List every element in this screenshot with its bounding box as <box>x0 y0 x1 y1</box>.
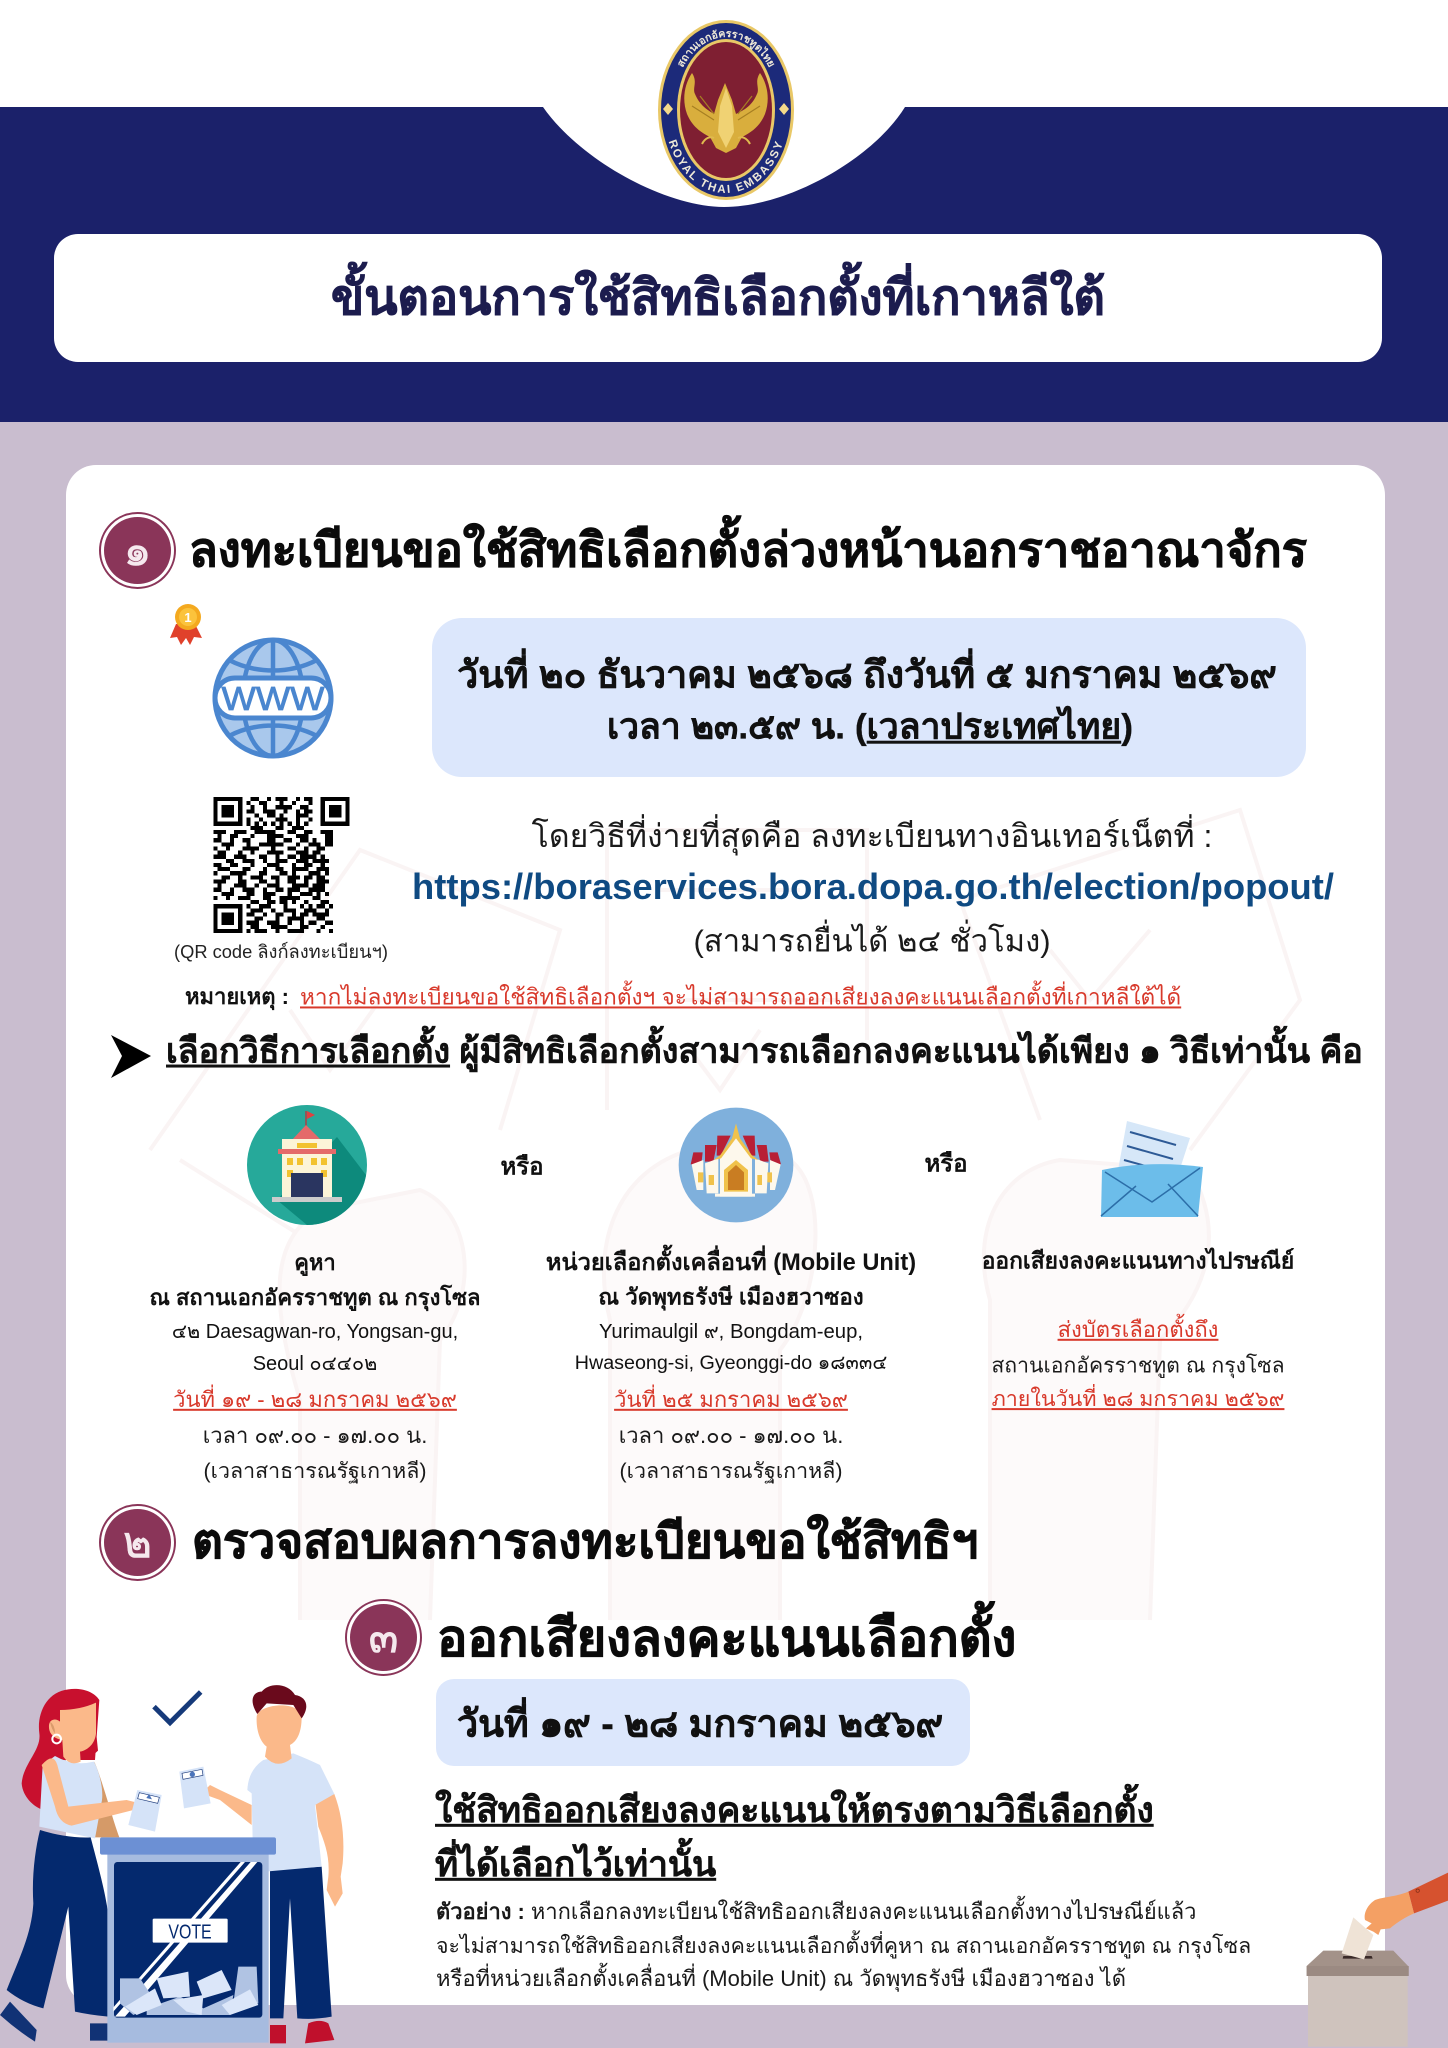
column 2 address line 2: Hwaseong-si, Gyeonggi-do ๑๘๓๓๔ <box>575 1352 887 1374</box>
column 2 place: ณ วัดพุทธรังษี เมืองฮวาซอง <box>598 1285 864 1310</box>
registration intro text: โดยวิธีที่ง่ายที่สุดคือ ลงทะเบียนทางอินเทอร์เน็ตที่ : <box>532 818 1212 854</box>
badge 2: ๒ <box>123 1518 152 1567</box>
header band <box>0 107 1448 422</box>
badge 3: ๓ <box>368 1613 399 1662</box>
example line 1: ตัวอย่าง : หากเลือกลงทะเบียนใช้สิทธิออกเสียงลงคะแนนเลือกตั้งทางไปรษณีย์แล้ว <box>436 1899 1196 1924</box>
remark label: หมายเหตุ : <box>185 984 289 1009</box>
QR caption: (QR code ลิงก์ลงทะเบียนฯ) <box>174 941 388 962</box>
date pill 1 <box>432 618 1306 777</box>
example line 3: หรือที่หน่วยเลือกตั้งเคลื่อนที่ (Mobile Unit) ณ วัดพุทธรังษี เมืองฮวาซอง ได้ <box>436 1966 1126 1991</box>
column 1 time: เวลา ๐๙.๐๐ - ๑๗.๐๐ น. <box>203 1423 427 1448</box>
date text line 2: เวลา ๒๓.๕๙ น. (เวลาประเทศไทย) <box>607 707 1133 747</box>
registration URL: https://boraservices.bora.dopa.go.th/election/popout/ <box>412 866 1334 907</box>
woman <box>0 1689 149 2042</box>
example line 2: จะไม่สามารถใช้สิทธิออกเสียงลงคะแนนเลือกตั้งที่คูหา ณ สถานเอกอัครราชทูต ณ กรุงโซล <box>436 1934 1251 1958</box>
ballot box: VOTE <box>168 1921 212 1944</box>
column 1 timezone: (เวลาสาธารณรัฐเกาหลี) <box>204 1459 426 1483</box>
check mark <box>154 1692 201 1723</box>
arrow <box>111 1035 151 1078</box>
instruction line 2: ที่ได้เลือกไว้เท่านั้น <box>435 1845 716 1884</box>
badge 1: ๑ <box>124 526 151 575</box>
title: ขั้นตอนการใช้สิทธิเลือกตั้งที่เกาหลีใต้ <box>331 271 1105 325</box>
column 2 time: เวลา ๐๙.๐๐ - ๑๗.๐๐ น. <box>619 1423 843 1448</box>
date text line 1: วันที่ ๒๐ ธันวาคม ๒๕๖๘ ถึงวันที่ ๕ มกราคม ๒๕๖๙ <box>457 654 1277 696</box>
content card <box>66 465 1385 2005</box>
man <box>202 1685 343 2043</box>
title pill <box>54 234 1382 362</box>
illustration: hand dropping ballot into box <box>1306 1872 1448 2046</box>
column 3 title: ออกเสียงลงคะแนนทางไปรษณีย์ <box>982 1247 1294 1273</box>
date text 3: วันที่ ๑๙ - ๒๘ มกราคม ๒๕๖๙ <box>457 1702 943 1744</box>
column 2 timezone: (เวลาสาธารณรัฐเกาหลี) <box>620 1459 842 1483</box>
icon: www globe: WWW <box>222 680 325 717</box>
watermark: raised hands with ballots <box>148 808 1302 1620</box>
ballots in hands <box>128 1767 211 1832</box>
column 3 destination: สถานเอกอัครราชทูต ณ กรุงโซล <box>991 1354 1285 1377</box>
instruction line 1: ใช้สิทธิออกเสียงลงคะแนนให้ตรงตามวิธีเลือกตั้ง <box>435 1791 1154 1830</box>
column 2 title: หน่วยเลือกตั้งเคลื่อนที่ (Mobile Unit) <box>546 1250 916 1276</box>
column 2: mobile unit <box>546 1244 916 1484</box>
logo: royal thai embassy emblem: ROYAL THAI EMBASSY <box>668 139 782 193</box>
heading 1: ลงทะเบียนขอใช้สิทธิเลือกตั้งล่วงหน้านอกราชอาณาจักร <box>189 523 1307 576</box>
badge 1 <box>99 512 176 589</box>
column 1 date: วันที่ ๑๙ - ๒๘ มกราคม ๒๕๖๙ <box>173 1387 457 1412</box>
icon: envelope <box>1100 1121 1203 1217</box>
badge 2 <box>99 1504 176 1581</box>
QR code <box>214 797 350 933</box>
icon: embassy building <box>247 1105 367 1225</box>
icon: medal <box>170 604 202 645</box>
column 1 place: ณ สถานเอกอัครราชทูต ณ กรุงโซล <box>149 1285 481 1310</box>
column 3: postal voting <box>982 1247 1294 1411</box>
illustration: two voters and ballot box <box>0 1685 344 2044</box>
header top white area with arch cut-out <box>0 0 1448 207</box>
logo: royal thai embassy emblem <box>658 20 794 200</box>
ballot box <box>100 1837 276 2043</box>
column 1 address line 2: Seoul ๐๔๔๐๒ <box>253 1353 377 1375</box>
remark warning: หากไม่ลงทะเบียนขอใช้สิทธิเลือกตั้งฯ จะไม่สามารถออกเสียงลงคะแนนเลือกตั้งที่เกาหลีใต้ได้ <box>300 984 1181 1009</box>
icon: www globe <box>212 638 334 758</box>
icon: temple <box>678 1108 794 1222</box>
heading 2: ตรวจสอบผลการลงทะเบียนขอใช้สิทธิฯ <box>192 1515 978 1568</box>
24 hour note: (สามารถยื่นได้ ๒๔ ชั่วโมง) <box>693 923 1051 958</box>
icon: medal: 1 <box>184 610 192 625</box>
column 1 address line 1: ๔๒ Daesagwan-ro, Yongsan-gu, <box>172 1321 458 1343</box>
choose method heading: เลือกวิธีการเลือกตั้ง ผู้มีสิทธิเลือกตั้งสามารถเลือกลงคะแนนได้เพียง ๑ วิธีเท่านั้น คือ <box>166 1033 1363 1071</box>
column 3 deadline: ภายในวันที่ ๒๘ มกราคม ๒๕๖๙ <box>992 1387 1284 1411</box>
column 2 date: วันที่ ๒๕ มกราคม ๒๕๖๙ <box>614 1387 848 1412</box>
logo: royal thai embassy emblem: สถานเอกอัครราชทูตไทย <box>678 29 774 68</box>
column 3 send label: ส่งบัตรเลือกตั้งถึง <box>1058 1317 1218 1342</box>
heading 3: ออกเสียงลงคะแนนเลือกตั้ง <box>437 1610 1016 1667</box>
column 1: embassy voting <box>149 1250 481 1484</box>
column 2 address line 1: Yurimaulgil ๙, Bongdam-eup, <box>599 1321 863 1343</box>
badge 3 <box>345 1599 422 1676</box>
or label 1: หรือ <box>500 1154 544 1181</box>
date pill 3 <box>436 1679 970 1766</box>
or label 2: หรือ <box>924 1151 968 1178</box>
column 1 title: คูหา <box>294 1250 336 1275</box>
